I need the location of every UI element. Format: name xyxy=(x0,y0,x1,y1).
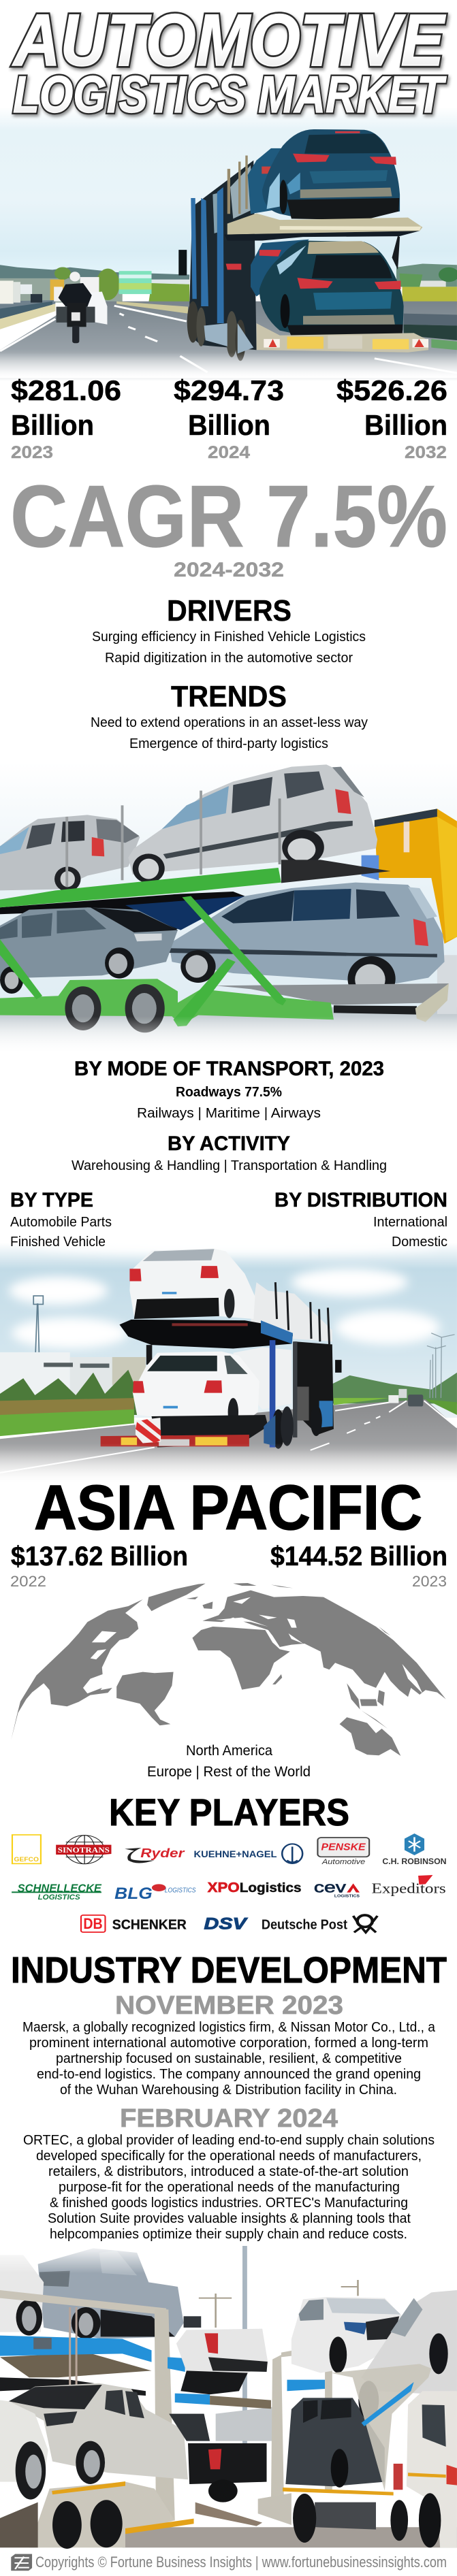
hero image: car carrier on highway xyxy=(0,107,457,381)
logo: DSV: DSV xyxy=(204,1914,248,1933)
november 2023 paragraph: partnership focused on sustainable, resilient, & competitive xyxy=(56,2051,402,2066)
by type panel xyxy=(10,1189,112,1250)
february 2024 paragraph: Solution Suite provides valuable insights & planning tools that xyxy=(48,2211,411,2226)
factory buildings xyxy=(0,1352,146,1395)
CAGR period: 2024-2032 xyxy=(174,559,284,581)
title xyxy=(12,0,447,124)
logo: Expeditors xyxy=(372,1875,446,1897)
lower platform xyxy=(216,983,449,1022)
november 2023 paragraph xyxy=(22,2019,436,2098)
region heading: ASIA PACIFIC xyxy=(34,1472,422,1543)
upper left silver van xyxy=(0,815,140,892)
left truck lower pickup xyxy=(0,2383,188,2500)
icon: motorcycle rider xyxy=(57,272,95,343)
market size 2032: Billion xyxy=(364,409,447,441)
market size 2032: 2032 xyxy=(405,443,447,462)
by type panel: Automobile Parts xyxy=(10,1214,112,1230)
logo: Kuehne+Nagel xyxy=(194,1844,302,1863)
logo: DB Schenker: SCHENKER xyxy=(112,1917,187,1933)
icon: green road sign xyxy=(119,271,152,294)
logo: GEFCO: GEFCO xyxy=(14,1856,39,1863)
market size 2023: Billion xyxy=(11,409,94,441)
logo: XPO Logistics: Logistics xyxy=(240,1880,301,1895)
logo: XPO Logistics: XPO xyxy=(208,1880,240,1895)
by distribution panel: BY DISTRIBUTION xyxy=(274,1189,447,1211)
drivers list: Surging efficiency in Finished Vehicle Logistics xyxy=(92,629,366,645)
icon: fortune business insights logo xyxy=(11,2554,32,2571)
truck: upper white car xyxy=(129,1248,255,1319)
logo: Expeditors: Expeditors xyxy=(372,1881,446,1897)
market size 2024 xyxy=(174,374,284,462)
left truck top pickup xyxy=(0,2248,184,2339)
by type panel: BY TYPE xyxy=(10,1189,93,1211)
february 2024 paragraph: & finished goods logistics industries. ORTEC's Manufacturing xyxy=(50,2195,408,2211)
february 2024 date: FEBRUARY 2024 xyxy=(120,2104,338,2133)
green trailer and arms xyxy=(0,896,334,1032)
key players logos, row 3 xyxy=(81,1914,377,1933)
logo: Schnellecke Logistics: LOGISTICS xyxy=(38,1893,80,1902)
november 2023 paragraph: prominent international automotive corporation, formed a long-term xyxy=(29,2035,428,2051)
logo: C.H. Robinson xyxy=(382,1833,447,1866)
world map xyxy=(11,1583,446,1756)
logo: XPO Logistics xyxy=(208,1880,301,1895)
region value 2022: $137.62 Billion xyxy=(11,1542,188,1571)
yellow trailer xyxy=(375,809,457,944)
right truck top pickup xyxy=(291,2297,403,2373)
truck: lower white car xyxy=(133,1340,309,1448)
other regions list: North America xyxy=(186,1742,272,1759)
november 2023 paragraph: Maersk, a globally recognized logistics firm, & Nissan Motor Co., Ltd., a xyxy=(22,2019,436,2035)
by distribution panel xyxy=(274,1189,447,1250)
truck: lower deck cars xyxy=(226,235,428,353)
trends list: Emergence of third-party logistics xyxy=(129,736,328,751)
logo: Penske Automotive: Automotive xyxy=(321,1857,365,1866)
activity list: Warehousing & Handling | Transportation & Handling xyxy=(72,1158,387,1173)
drivers heading: DRIVERS xyxy=(167,594,291,627)
market size 2024: 2024 xyxy=(208,443,250,462)
by distribution panel: Domestic xyxy=(392,1234,447,1250)
mode of transport list xyxy=(137,1084,321,1121)
november 2023 paragraph: end-to-end logistics. The company announced the grand opening xyxy=(37,2066,421,2082)
logo: CEVA Logistics xyxy=(314,1880,360,1898)
logo: CEVA Logistics: cev xyxy=(314,1880,346,1896)
logo: Sinotrans xyxy=(56,1836,111,1864)
image: car carriers with pickups xyxy=(0,2244,457,2549)
market size 2032 xyxy=(336,374,447,462)
truck: rear bumper and wheels xyxy=(101,1405,322,1449)
november 2023 date: NOVEMBER 2023 xyxy=(115,1991,343,2020)
logo: Ryder xyxy=(125,1846,185,1863)
upper deck structure xyxy=(0,860,390,930)
logo: BLG Logistics: LOGISTICS xyxy=(165,1887,196,1894)
logo: Kuehne+Nagel: KUEHNE+NAGEL xyxy=(194,1849,277,1859)
right truck frame and dark car xyxy=(271,2343,385,2511)
region value 2023: 2023 xyxy=(412,1573,447,1590)
february 2024 paragraph: helpcompanies optimize their supply chain and reduce costs. xyxy=(50,2226,407,2242)
black pickup xyxy=(169,2414,267,2526)
trends list xyxy=(91,715,368,751)
logo: CEVA Logistics: LOGISTICS xyxy=(334,1894,360,1898)
february 2024 paragraph: developed specifically for the operational needs of manufacturers, xyxy=(36,2148,422,2164)
logo: Ryder: Ryder xyxy=(140,1846,185,1860)
other regions list xyxy=(147,1742,311,1780)
logo: Schnellecke Logistics: SCHNELLECKE xyxy=(18,1882,102,1895)
logo: Penske Automotive xyxy=(317,1838,369,1866)
mode of transport list: Roadways 77.5% xyxy=(176,1084,282,1100)
logo: Penske Automotive: PENSKE xyxy=(321,1842,366,1853)
logo: GEFCO xyxy=(12,1835,41,1863)
logo: Sinotrans: SINOTRANS xyxy=(58,1846,110,1855)
february 2024 paragraph: retailers, & distributors, introduced a state-of-the-art solution xyxy=(48,2164,409,2179)
drivers list xyxy=(92,629,366,666)
region value 2022 xyxy=(10,1542,188,1590)
mode of transport heading: BY MODE OF TRANSPORT, 2023 xyxy=(74,1058,384,1080)
trends list: Need to extend operations in an asset-less way xyxy=(91,715,368,730)
market size 2023: 2023 xyxy=(11,443,53,462)
lower right blue-grey van xyxy=(169,883,445,1002)
by type panel: Finished Vehicle xyxy=(10,1234,106,1250)
logo: Deutsche Post: Deutsche Post xyxy=(262,1917,347,1933)
logo: Schnellecke Logistics xyxy=(12,1882,102,1902)
february 2024 paragraph xyxy=(23,2132,435,2242)
tower xyxy=(33,1296,43,1352)
left truck deck and frame xyxy=(0,2290,185,2520)
market size 2023: $281.06 xyxy=(11,374,121,406)
market size 2023 xyxy=(11,374,121,462)
drivers list: Rapid digitization in the automotive sector xyxy=(105,650,353,666)
other regions list: Europe | Rest of the World xyxy=(147,1763,311,1780)
image: highway car carrier with white cars xyxy=(0,1237,457,1484)
february 2024 paragraph: ORTEC, a global provider of leading end-to-end supply chain solutions xyxy=(23,2132,435,2148)
upper right silver van xyxy=(65,764,377,887)
market size 2024: Billion xyxy=(188,409,270,441)
market size 2024: $294.73 xyxy=(174,374,284,406)
right truck chassis and cab xyxy=(258,2391,457,2547)
region value 2023 xyxy=(270,1542,447,1590)
truck: trailer structure xyxy=(178,156,257,361)
truck: upper deck cars xyxy=(224,129,422,241)
key players heading: KEY PLAYERS xyxy=(109,1791,349,1833)
activity heading: BY ACTIVITY xyxy=(168,1132,290,1155)
trends heading: TRENDS xyxy=(171,680,287,713)
by distribution panel: International xyxy=(373,1214,447,1230)
logo: BLG Logistics: BLG xyxy=(114,1884,153,1902)
middle white pickup xyxy=(175,2316,271,2409)
lower left blue-grey car xyxy=(0,907,178,994)
left truck chassis xyxy=(0,2481,194,2549)
right truck top right car xyxy=(331,2290,457,2491)
region value 2022: 2022 xyxy=(10,1573,46,1590)
region value 2023: $144.52 Billion xyxy=(270,1542,447,1571)
key players logos, row 1 and 2 xyxy=(12,1833,447,1902)
market size 2032: $526.26 xyxy=(336,374,447,406)
logo: DB Schenker xyxy=(81,1915,187,1933)
logo: BLG Logistics xyxy=(114,1884,196,1902)
logo: DB Schenker: DB xyxy=(83,1916,103,1932)
november 2023 paragraph: of the Wuhan Warehousing & Distribution facility in China. xyxy=(60,2082,397,2098)
mode of transport list: Railways | Maritime | Airways xyxy=(137,1105,321,1121)
february 2024 paragraph: purpose-fit for the operational needs of the manufacturing xyxy=(59,2179,400,2195)
image: green car carrier with silver vans xyxy=(0,762,457,1055)
truck: rear structure xyxy=(251,1282,341,1435)
truck: deck xyxy=(119,1320,293,1365)
